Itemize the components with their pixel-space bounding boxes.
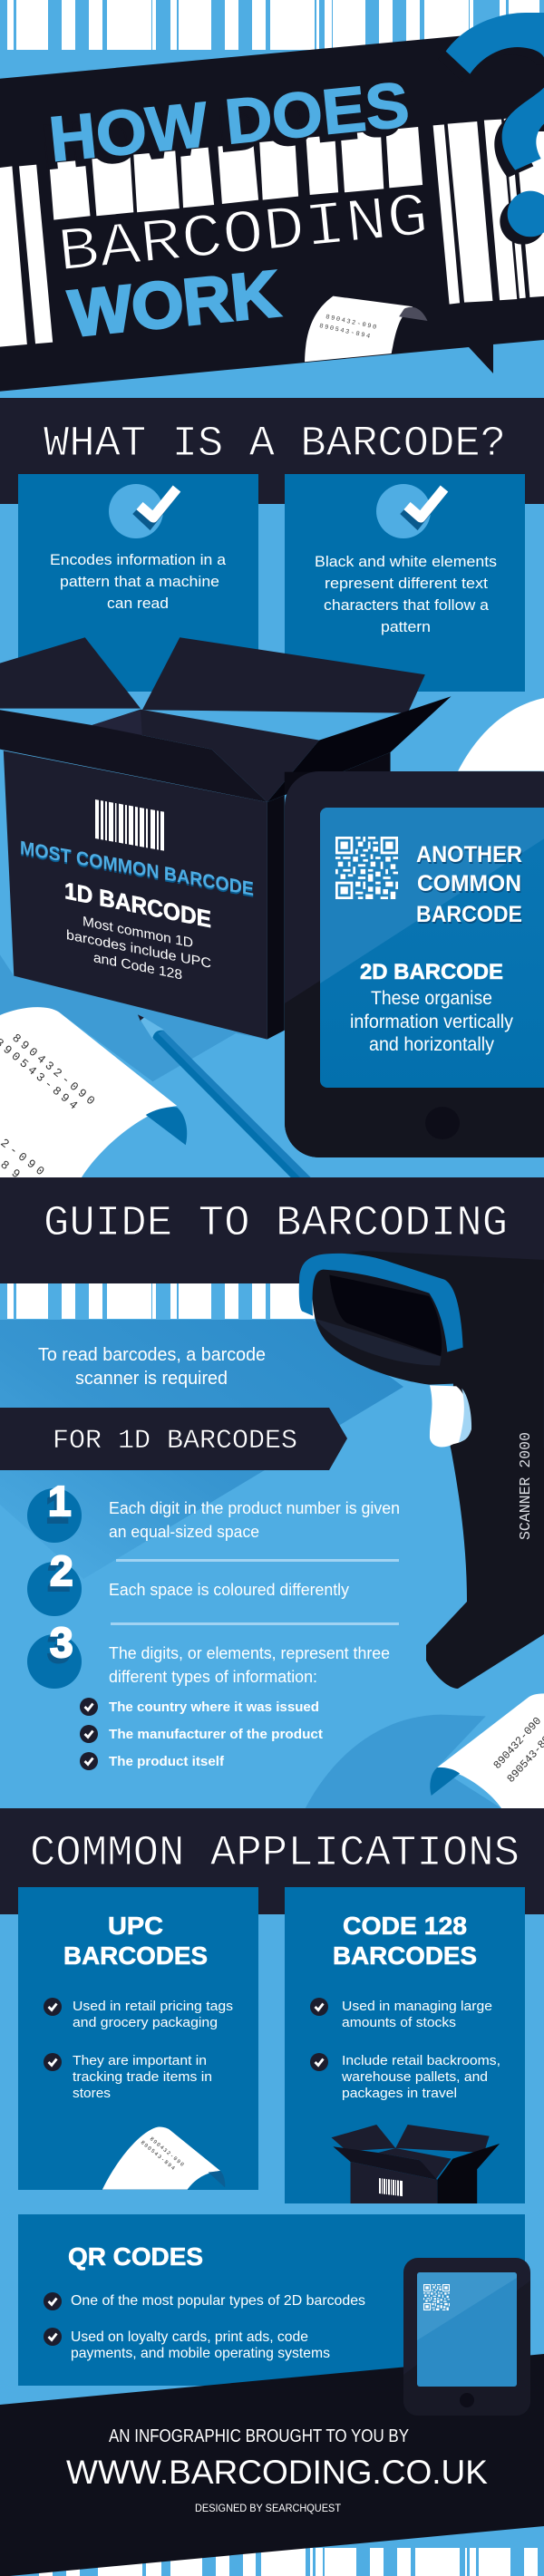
text: another common barcode: COMMON (417, 871, 521, 896)
heading: guide to barcoding: GUIDE TO BARCODING (44, 1200, 508, 1248)
checklist: three types of information: The product itself (109, 1754, 225, 1769)
text: another common barcode: BARCODE (416, 902, 522, 927)
title: how does: HOW DOES (46, 69, 413, 175)
step 1 (27, 1477, 400, 1543)
upc bullet 2: They are important in (73, 2053, 207, 2068)
step 2: 2 (47, 1553, 71, 1600)
text: 2d barcode: 2D BARCODE (360, 960, 503, 984)
icon: corner receipt (306, 1693, 544, 1808)
upc bullet 1: and grocery packaging (73, 2015, 218, 2030)
upc bullet 1: Used in retail pricing tags (73, 1999, 233, 2014)
scanner beam (0, 1320, 403, 1579)
box text: description: Most common 1D (83, 914, 193, 951)
panel: tablet with 2d barcode (285, 771, 544, 1160)
step 1: 1 (48, 1477, 72, 1525)
step 3 (27, 1619, 390, 1689)
text: another common barcode (416, 842, 523, 929)
heading: upc: UPC (108, 1912, 163, 1940)
icon: hero receipt (305, 296, 427, 362)
title: barcoding: BARCODING (54, 183, 432, 289)
text: encodes: pattern that a machine (60, 573, 219, 590)
text: encodes: Encodes information in a (50, 551, 227, 568)
checklist: three types of information: The manufacturer of the product (109, 1727, 323, 1742)
checklist: three types of information (80, 1698, 323, 1770)
panel: black and white elements (285, 474, 525, 692)
text: elements: Black and white elements (315, 553, 497, 570)
heading banner: for 1d barcodes (0, 1408, 347, 1470)
heading: code 128 (333, 1912, 477, 1970)
footer: website: WWW.BARCODING.CO.UK (66, 2454, 488, 2491)
icon: check badge (376, 484, 444, 538)
footer: brought to you by: AN INFOGRAPHIC BROUGHT TO YOU BY (109, 2426, 409, 2446)
box shadow (0, 954, 267, 1081)
icon: small box (331, 2125, 500, 2203)
step 3: The digits, or elements, represent three (109, 1644, 390, 1662)
icon: home button (425, 1107, 460, 1139)
text: elements: represent different text (325, 575, 488, 592)
code 128 bullet 2 (310, 2053, 500, 2101)
step 2: 2 (50, 1547, 73, 1594)
text: 2d description: These organise (371, 988, 492, 1009)
box barcode (95, 799, 164, 851)
step 1: Each digit in the product number is given (109, 1499, 400, 1517)
icon: small receipt: 890543-894 (140, 2139, 177, 2172)
step 3: 3 (47, 1624, 71, 1671)
checklist: three types of information: The country where it was issued (109, 1700, 319, 1715)
qr bullet 2 (44, 2328, 330, 2361)
scanner trigger (430, 1385, 471, 1447)
step 3: different types of information: (109, 1668, 317, 1686)
code 128 bullet 2: packages in travel (342, 2086, 457, 2101)
icon: curled receipt: 890432-090 (9, 1031, 97, 1108)
box text: description (66, 914, 211, 983)
icon: barcode scanner (299, 1251, 544, 1689)
icon: pencil (138, 1014, 311, 1177)
step 1: an equal-sized space (109, 1523, 259, 1541)
text: 2d description: information vertically (350, 1012, 513, 1032)
text: elements: characters that follow a (324, 596, 490, 614)
heading: qr codes: QR CODES (68, 2242, 203, 2271)
upc bullet 2: stores (73, 2086, 111, 2101)
text: 2d description: and horizontally (369, 1034, 494, 1055)
text: another common barcode: ANOTHER (417, 844, 523, 869)
title: how does: HOW DOES (38, 77, 404, 183)
section band: what is a barcode (0, 398, 544, 504)
step 2: Each space is coloured differently (109, 1581, 349, 1599)
icon: check badge (109, 484, 177, 538)
text: encodes: can read (107, 595, 169, 612)
text: another common barcode: COMMON (418, 873, 522, 898)
icon: small receipt: 890432-090 (149, 2135, 186, 2168)
qr bullet 1: One of the most popular types of 2D barcodes (71, 2293, 365, 2309)
bottom barcode stripes (39, 2548, 538, 2576)
section band: guide to barcoding (0, 1177, 544, 1283)
footer: designer credit: DESIGNED BY SEARCHQUEST (195, 2502, 342, 2514)
icon: curled receipt (0, 1007, 187, 1181)
text: another common barcode: BARCODE (417, 904, 523, 929)
text: encodes (50, 551, 227, 612)
box text: most common barcode: MOST COMMON BARCODE (20, 839, 254, 902)
step 2 (27, 1547, 399, 1625)
hero banner with speech tail (0, 28, 544, 392)
icon: hero receipt: 890432-090 (325, 314, 377, 332)
upc bullet 1 (44, 1998, 233, 2030)
text: elements: pattern (381, 618, 431, 635)
icon: open box (0, 637, 452, 1040)
box text: most common barcode: MOST COMMON BARCODE (20, 838, 254, 900)
hero barcode bars (0, 115, 544, 347)
qr bullet 2: payments, and mobile operating systems (71, 2346, 330, 2361)
step 3: 3 (50, 1619, 73, 1666)
text: another common barcode: ANOTHER (416, 842, 522, 867)
heading: code 128: CODE 128 (343, 1912, 467, 1940)
heading: upc: BARCODES (63, 1942, 208, 1970)
heading: upc (63, 1912, 208, 1970)
upc bullet 2 (44, 2053, 212, 2101)
title: work: WORK (66, 257, 282, 351)
step 1: 1 (45, 1485, 69, 1532)
footer band (0, 2354, 544, 2576)
icon: small receipt (102, 2127, 225, 2190)
text: elements (315, 553, 497, 635)
box text: description: and Code 128 (93, 950, 182, 983)
box text: description: barcodes include UPC (66, 927, 211, 972)
decorative white blob (458, 698, 544, 771)
scanner label: SCANNER 2000 (517, 1432, 534, 1540)
heading banner: for 1d barcodes: FOR 1D BARCODES (53, 1426, 297, 1457)
icon: hero receipt: 890543-894 (318, 323, 371, 341)
heading: code 128: BARCODES (333, 1942, 477, 1970)
panel: code 128 barcodes (285, 1887, 525, 2203)
code 128 bullet 1: amounts of stocks (342, 2015, 456, 2030)
box text: 1d barcode: 1D BARCODE (64, 876, 211, 933)
qr code (335, 837, 398, 899)
panel: upc barcodes (18, 1887, 258, 2190)
qr bullet 2: Used on loyalty cards, print ads, code (71, 2329, 308, 2345)
icon: corner receipt: 890432-090 (491, 1715, 544, 1772)
top barcode stripes (7, 0, 539, 50)
heading: what is a barcode: WHAT IS A BARCODE? (44, 421, 506, 469)
code 128 bullet 2: warehouse pallets, and (341, 2069, 488, 2085)
text: to read barcodes: scanner is required (75, 1369, 228, 1389)
heading: common applications: COMMON APPLICATIONS (30, 1830, 520, 1878)
code 128 bullet 1: Used in managing large (342, 1999, 492, 2014)
upc bullet 2: tracking trade items in (73, 2069, 212, 2085)
panel: qr codes (18, 2214, 525, 2386)
guide barcode stripes (7, 1283, 315, 1319)
text: to read barcodes: To read barcodes, a barcode (38, 1345, 266, 1365)
section band: common applications (0, 1808, 544, 1914)
code 128 bullet 2: Include retail backrooms, (342, 2053, 500, 2068)
icon: question mark (438, 13, 544, 245)
text: 2d description (350, 988, 513, 1055)
panel: encodes information (18, 474, 258, 692)
code 128 bullet 1 (310, 1998, 492, 2030)
icon: small tablet (403, 2258, 530, 2416)
text: to read barcodes (38, 1345, 266, 1389)
